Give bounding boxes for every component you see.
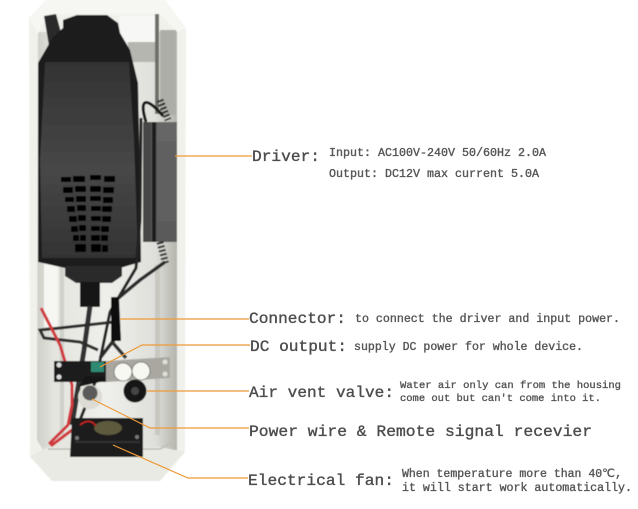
label: driver: Driver: xyxy=(252,148,320,166)
cables xyxy=(40,118,165,445)
cable glands xyxy=(114,362,150,381)
leader line: DC output xyxy=(100,345,250,367)
photo: open device housing xyxy=(29,0,186,481)
power driver xyxy=(143,100,177,265)
air vent valve xyxy=(124,380,146,402)
label: air vent valve: Air vent valve: xyxy=(249,384,394,402)
power wire grommet xyxy=(78,376,106,409)
label: air vent valve: come out but can't come into it. xyxy=(400,393,601,405)
leader line: air vent valve xyxy=(147,390,249,392)
label: connector: to connect the driver and input power. xyxy=(355,313,620,326)
label: connector: Connector: xyxy=(249,310,346,328)
driver input spec: Input: AC100V-240V 50/60Hz 2.0A xyxy=(329,147,546,160)
mounting plate xyxy=(54,357,170,382)
label: air vent valve: Water air only can from the housing xyxy=(400,380,621,392)
label: power wire and remote signal receiver: Power wire & Remote signal recevier xyxy=(249,423,592,441)
icon: vent grid xyxy=(61,175,115,252)
label: electrical fan: it will start work automatically. xyxy=(402,482,632,495)
leader line: electrical fan xyxy=(113,445,248,478)
electrical fan xyxy=(70,418,143,457)
label: air vent valve xyxy=(249,380,621,405)
driver output spec: Output: DC12V max current 5.0A xyxy=(329,168,539,181)
label: DC output: supply DC power for whole device. xyxy=(354,341,583,354)
DC output terminal xyxy=(91,362,104,372)
label: connector xyxy=(249,310,620,328)
housing shell xyxy=(29,0,186,481)
label: electrical fan: Electrical fan: xyxy=(248,472,394,490)
leader line: driver xyxy=(175,155,252,157)
label: electrical fan: When temperature more than 40℃, xyxy=(402,468,622,481)
label: driver xyxy=(252,147,546,166)
heater unit: black body xyxy=(38,14,141,307)
label: DC output xyxy=(250,338,583,356)
leader line: power wire xyxy=(92,399,249,428)
leader line: connector xyxy=(120,318,249,320)
label: DC output: DC output: xyxy=(250,338,347,356)
label: electrical fan xyxy=(248,468,632,495)
